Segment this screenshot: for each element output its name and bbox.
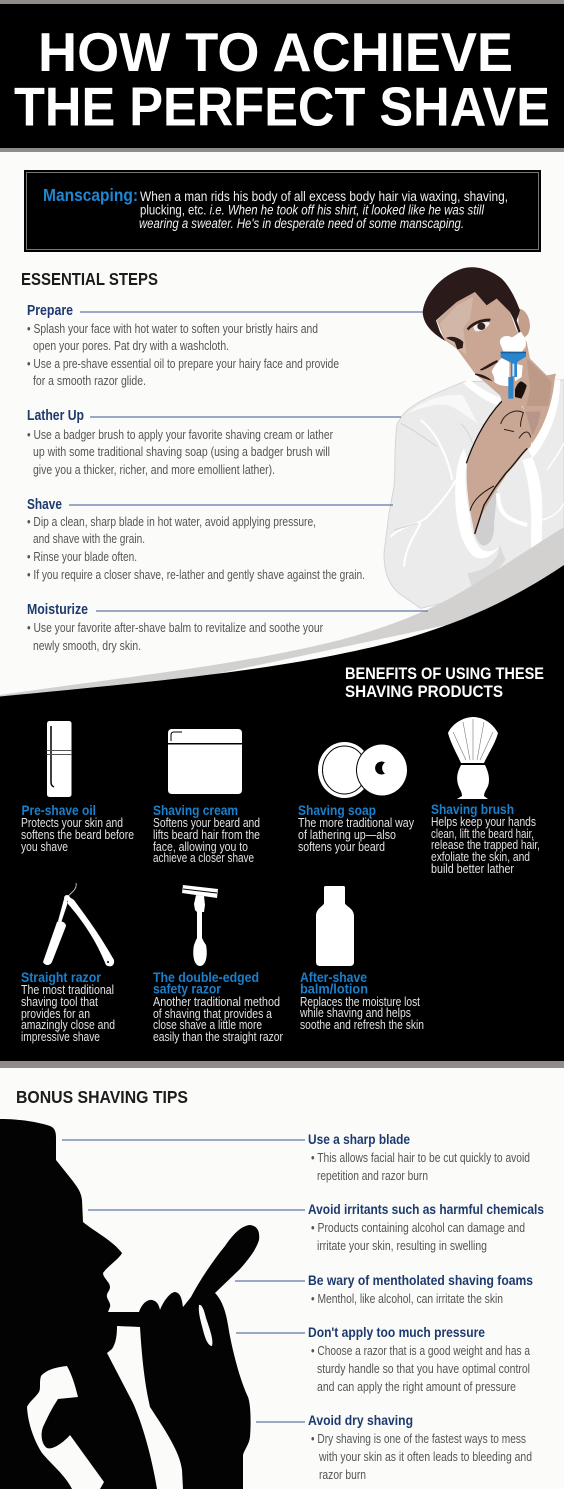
sleeve opening [471,490,497,546]
product: shaving brush: Shaving brush [431,801,514,817]
prepare text [27,322,339,388]
robe highlights [407,395,477,423]
moisturize text [27,621,323,653]
product: shaving soap: The more traditional way [298,815,414,830]
product: after-shave balm: soothe and refresh the skin [300,1017,424,1032]
moisturize text: newly smooth, dry skin. [33,639,141,653]
tip: avoid irritants: • Products containing alcohol can damage and [311,1221,525,1235]
icon: brush [448,717,498,799]
title banner [0,0,564,152]
product: double-edged safety razor: close shave a little more [153,1017,262,1032]
product: straight razor: The most traditional [21,982,114,997]
product: shaving soap: of lathering up—also [298,827,396,842]
heading: benefits: SHAVING PRODUCTS [345,682,503,701]
manscaping definition: When a man rids his body of all excess body hair via waxing, shaving, [140,189,508,204]
step: moisturize [27,602,428,653]
product: straight razor: shaving tool that [21,994,98,1009]
step: lather up [27,408,401,477]
product: pre-shave oil: you shave [21,839,68,854]
prepare text: open your pores. Pat dry with a washcloth. [33,339,229,353]
product: straight razor: Straight razor [21,969,101,985]
lather up text [27,428,333,477]
shave heading: Shave [27,497,62,513]
forearm and hand [467,399,532,534]
product: after-shave balm: After-shave [300,969,367,985]
prepare text: for a smooth razor glide. [33,374,146,388]
product: shaving soap: softens your beard [298,839,385,854]
prepare text: • Use a pre-shave essential oil to prepare your hairy face and provide [27,357,339,371]
product: double-edged safety razor: The double-edged [153,969,259,985]
product: after-shave balm: balm/lotion [300,980,368,996]
razor [501,352,526,399]
icon: straight razor [43,883,114,966]
tip: mentholated foams: • Menthol, like alcohol, can irritate the skin [311,1292,503,1306]
product: straight razor [21,883,115,1044]
product: pre-shave oil: Protects your skin and [21,815,123,830]
robe lapel upper [528,380,560,458]
shave text [27,515,365,582]
icon: lotion bottle [316,886,354,966]
definition box: manscaping [24,170,541,252]
product: pre-shave oil: Pre-shave oil [22,802,96,818]
lather up text: give you a thicker, richer, and more emollient lather). [33,463,275,477]
hand gap [199,1305,212,1346]
product: pre-shave oil: softens the beard before [21,827,134,842]
mouth and chin [475,360,498,381]
product: shaving brush: Helps keep your hands [431,814,536,829]
product: double-edged safety razor [153,885,284,1044]
tip: pressure: Don't apply too much pressure [308,1324,485,1340]
product: shaving cream: achieve a closer shave [153,850,254,865]
shaving foam [492,331,526,386]
prepare heading: Prepare [27,303,73,319]
tip: avoid dry shaving [256,1412,532,1482]
lather up text: • Use a badger brush to apply your favorite shaving cream or lather [27,428,333,442]
product: pre-shave oil [21,721,134,854]
product: shaving soap [298,742,414,854]
icon: cream jar [168,729,242,794]
product: shaving cream: Softens your beard and [153,815,260,830]
step: shave [27,497,393,582]
product: straight razor: impressive shave [21,1029,100,1044]
shave text: and shave with the grain. [33,532,145,546]
hair [423,267,524,341]
product: shaving cream: lifts beard hair from the [153,827,260,842]
tip: use a sharp blade: Use a sharp blade [308,1131,410,1147]
shave text: • Rinse your blade often. [27,550,137,564]
collar gap [27,1366,104,1489]
silhouette: man shaving [0,1119,259,1489]
product: after-shave balm [299,886,424,1032]
eyes [446,319,491,349]
chest [516,380,556,445]
heading: benefits [345,664,544,701]
shave text: • If you require a closer shave, re-lather and gently shave against the grain. [27,568,365,582]
tip: avoid dry shaving: razor burn [319,1468,366,1482]
tip: mentholated foams: Be wary of mentholated shaving foams [308,1272,533,1288]
tip: use a sharp blade [62,1131,530,1183]
head [423,267,556,406]
product: after-shave balm: while shaving and helps [299,1005,411,1020]
manscaping definition: plucking, etc. i.e. When he took off his shirt, it looked like he was still [140,202,485,218]
robe body [384,380,564,608]
product: straight razor: provides for an [21,1006,90,1021]
sleeve cuff [455,448,501,558]
divider band [0,1061,564,1068]
product: double-edged safety razor: of shaving that provides a [153,1006,273,1021]
product: shaving brush [431,717,540,876]
shave text: • Dip a clean, sharp blade in hot water, avoid applying pressure, [27,515,316,529]
heading: essential steps: ESSENTIAL STEPS [21,269,158,289]
product: shaving brush: clean, lift the beard hair, [431,826,534,841]
product: shaving soap: Shaving soap [298,802,376,818]
icon: safety razor [182,885,218,966]
moisturize text: • Use your favorite after-shave balm to revitalize and soothe your [27,621,323,635]
swoosh divider [0,527,564,1062]
tip: pressure: and can apply the right amount of pressure [317,1380,516,1394]
tip: use a sharp blade: repetition and razor burn [317,1169,428,1183]
product: shaving brush: exfoliate the skin, and [431,849,530,864]
lather up heading: Lather Up [27,408,84,424]
tip: pressure [236,1324,530,1394]
illustration: man shaving [384,267,564,608]
product: after-shave balm: Replaces the moisture lost [300,994,420,1009]
tip: avoid irritants [88,1201,544,1253]
product: double-edged safety razor: safety razor [153,980,221,996]
manscaping term: Manscaping: [43,185,138,205]
product: straight razor: amazingly close and [21,1017,115,1032]
icon: oil bottle [46,721,72,797]
thumb shadow [515,381,527,399]
product: double-edged safety razor: Another traditional method [153,994,280,1009]
robe collar [463,380,503,405]
icon: soap dish and lid [318,742,408,798]
moisturize heading: Moisturize [27,602,88,618]
prepare text: • Splash your face with hot water to soften your bristly hairs and [27,322,318,336]
product: shaving cream: face, allowing you to [153,839,248,854]
manscaping definition [139,189,508,231]
neck and face skin [437,292,556,406]
tip: mentholated foams [235,1272,533,1306]
step: prepare [27,303,423,388]
robe lapel lower [522,457,542,562]
tip: avoid irritants: irritate your skin, resulting in swelling [317,1239,487,1253]
product: shaving brush: build better lather [431,861,515,876]
product: shaving cream [153,729,260,865]
heading: bonus tips: BONUS SHAVING TIPS [16,1087,188,1107]
title line 1: HOW TO ACHIEVE [38,21,513,83]
product: double-edged safety razor: easily than the straight razor [153,1029,284,1044]
manscaping definition: wearing a sweater. He's in desperate need of some manscaping. [139,216,464,231]
product: shaving cream: Shaving cream [153,802,238,818]
ear [518,309,530,337]
tip: avoid dry shaving: Avoid dry shaving [308,1412,413,1428]
lather up text: up with some traditional shaving soap (using a badger brush will [33,445,330,459]
